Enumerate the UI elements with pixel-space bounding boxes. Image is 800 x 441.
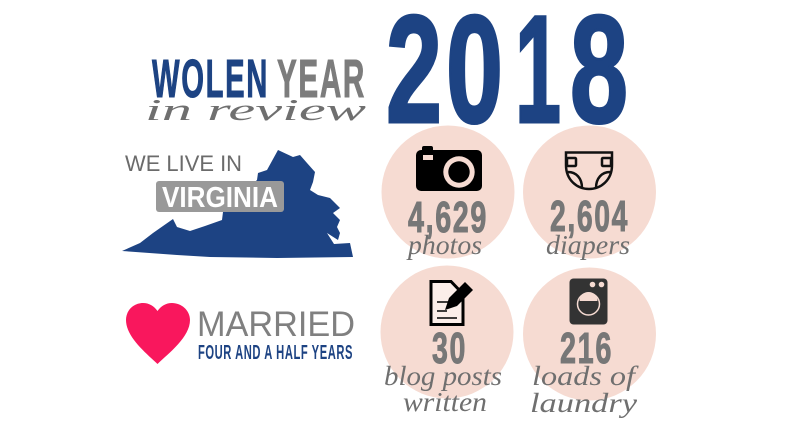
icon: document and pencil [431,282,473,324]
text: married: MARRIED [197,305,355,344]
caption: diapers: diapers [546,230,630,260]
number: 4,629: 4,629 [408,193,488,242]
stat: laundry [523,268,656,418]
title: Wolen Year in review: WOLEN [152,49,269,109]
stat: blog posts [380,266,514,417]
icon: heart [126,303,190,364]
title: Wolen Year in review: in review [145,92,367,127]
caption: blog posts written: written [403,387,487,417]
number: 30: 30 [432,324,467,373]
caption: loads of laundry [530,361,639,418]
icon: diaper [566,152,612,189]
caption: photos: photos [406,230,482,260]
title: Wolen Year in review: YEAR [277,49,366,109]
icon: washing machine [570,278,608,324]
map: Virginia state [122,150,353,258]
stat: diapers [523,126,656,260]
text: we live in: WE LIVE IN [125,151,242,176]
heading: year 2018 [386,0,628,155]
icon: camera [416,146,482,191]
caption: loads of laundry: loads of [532,361,639,391]
number: 2,604: 2,604 [550,192,629,241]
caption: blog posts written [384,361,502,417]
caption: loads of laundry: laundry [530,388,637,418]
number: 216: 216 [560,324,613,373]
stat: photos [382,126,514,260]
text: four and a half years: FOUR AND A HALF YEARS [198,342,353,364]
label: Virginia: VIRGINIA [162,182,278,214]
caption: blog posts written: blog posts [384,361,502,391]
